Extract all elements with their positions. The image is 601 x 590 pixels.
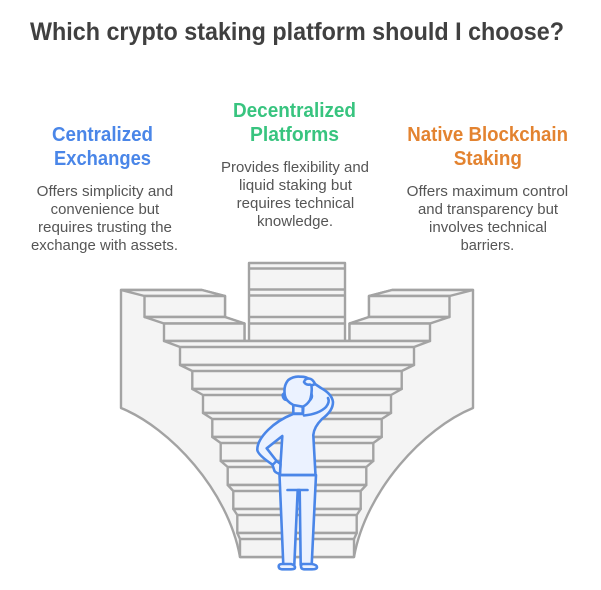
left upper steps (121, 290, 244, 341)
right foot (301, 564, 317, 569)
center tower (249, 263, 345, 341)
icon: person scratching head (257, 377, 333, 569)
legs (280, 475, 316, 565)
torso and arms (257, 380, 333, 475)
text block: centralized exchanges description: Offers simplicity and (37, 184, 173, 200)
text block: native blockchain staking description: Offers maximum control (407, 184, 568, 200)
left hand (272, 461, 280, 474)
left ear (283, 393, 287, 400)
panel: centralized exchanges (31, 124, 178, 254)
right ear (309, 394, 312, 401)
outer wall silhouette (121, 290, 473, 557)
heading: centralized exchanges: Centralized (52, 124, 153, 146)
text block: centralized exchanges description: convenience but (51, 202, 159, 218)
text block: decentralized platforms description (221, 160, 369, 230)
head (284, 377, 312, 407)
text block: decentralized platforms description: liquid staking but (239, 178, 352, 194)
heading: decentralized platforms: Platforms (250, 124, 339, 146)
central descending steps (164, 341, 430, 557)
text block: native blockchain staking description: barriers. (461, 238, 514, 254)
text block: centralized exchanges description (31, 184, 178, 254)
heading: native blockchain staking: Native Blockchain (407, 124, 568, 146)
text block: decentralized platforms description: Provides flexibility and (221, 160, 369, 176)
pocket line (288, 489, 308, 491)
heading: centralized exchanges: Exchanges (54, 148, 151, 170)
neck (293, 404, 303, 414)
left foot (279, 564, 295, 569)
heading: native blockchain staking: Staking (454, 148, 522, 170)
raised arm inner line (304, 398, 329, 416)
heading: native blockchain staking (407, 124, 568, 170)
text block: centralized exchanges description: requires trusting the (38, 220, 172, 236)
title: Which crypto staking platform should I choose? (30, 18, 564, 46)
text block: native blockchain staking description: and transparency but (418, 202, 558, 218)
chart: stepped funnel structure (121, 263, 473, 557)
panel: native blockchain staking (407, 124, 568, 254)
right upper steps (350, 290, 473, 341)
text block: decentralized platforms description: knowledge. (257, 214, 333, 230)
panel: decentralized platforms (221, 100, 369, 230)
text block: decentralized platforms description: requires technical (237, 196, 354, 212)
waistband (280, 474, 316, 476)
heading: centralized exchanges (52, 124, 153, 170)
heading: decentralized platforms (233, 100, 356, 146)
raised hand (304, 378, 315, 385)
text block: native blockchain staking description: involves technical (429, 220, 547, 236)
text block: centralized exchanges description: exchange with assets. (31, 238, 178, 254)
heading: decentralized platforms: Decentralized (233, 100, 356, 122)
text block: native blockchain staking description (407, 184, 568, 254)
